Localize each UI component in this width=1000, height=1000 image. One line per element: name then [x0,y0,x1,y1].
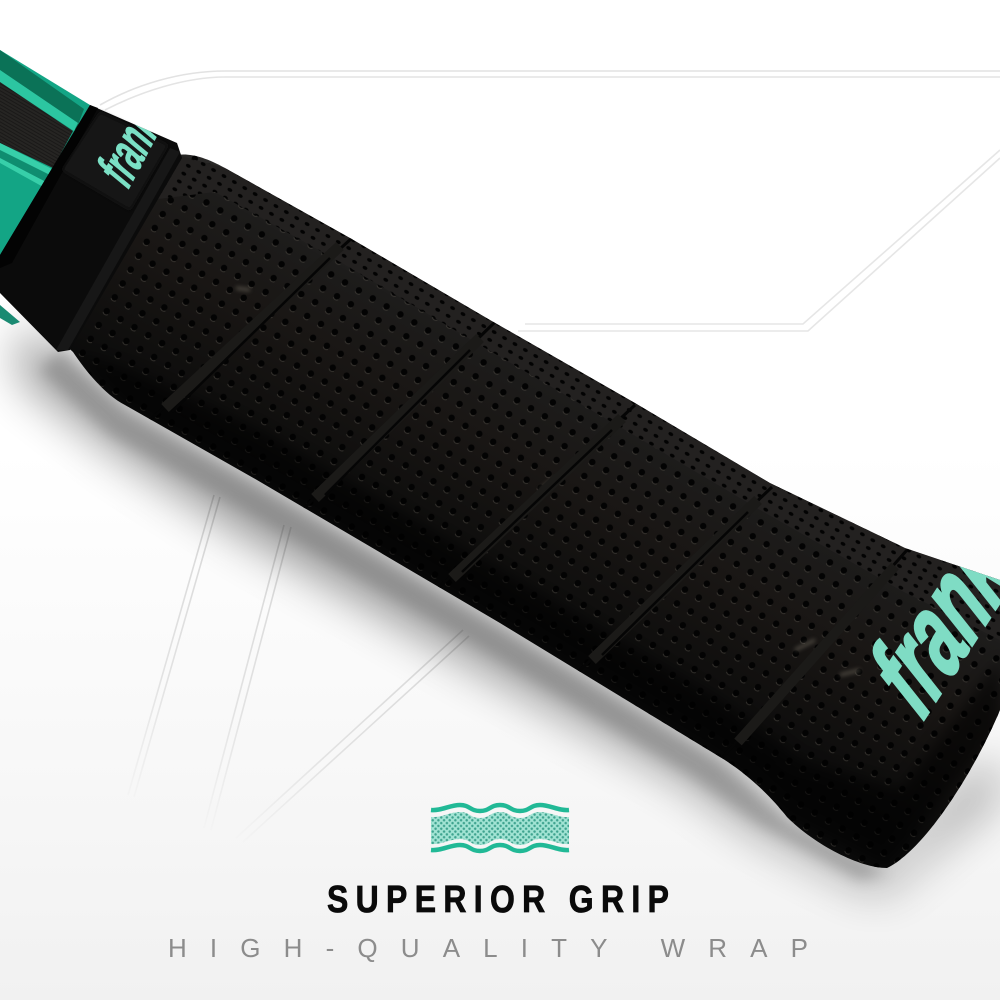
tape seams [150,238,907,758]
faint racket outline lines [100,71,1000,842]
grip body [70,154,1000,868]
collar ring [0,97,182,352]
paddle throat: teal frame and mesh [0,50,90,325]
icon: grip wrap waves [431,805,569,851]
heading: SUPERIOR GRIP [327,878,669,921]
subheading: HIGH-QUALITY WRAP [168,933,808,963]
collar logo: frank [86,97,172,197]
grip drop shadow [20,330,1000,890]
